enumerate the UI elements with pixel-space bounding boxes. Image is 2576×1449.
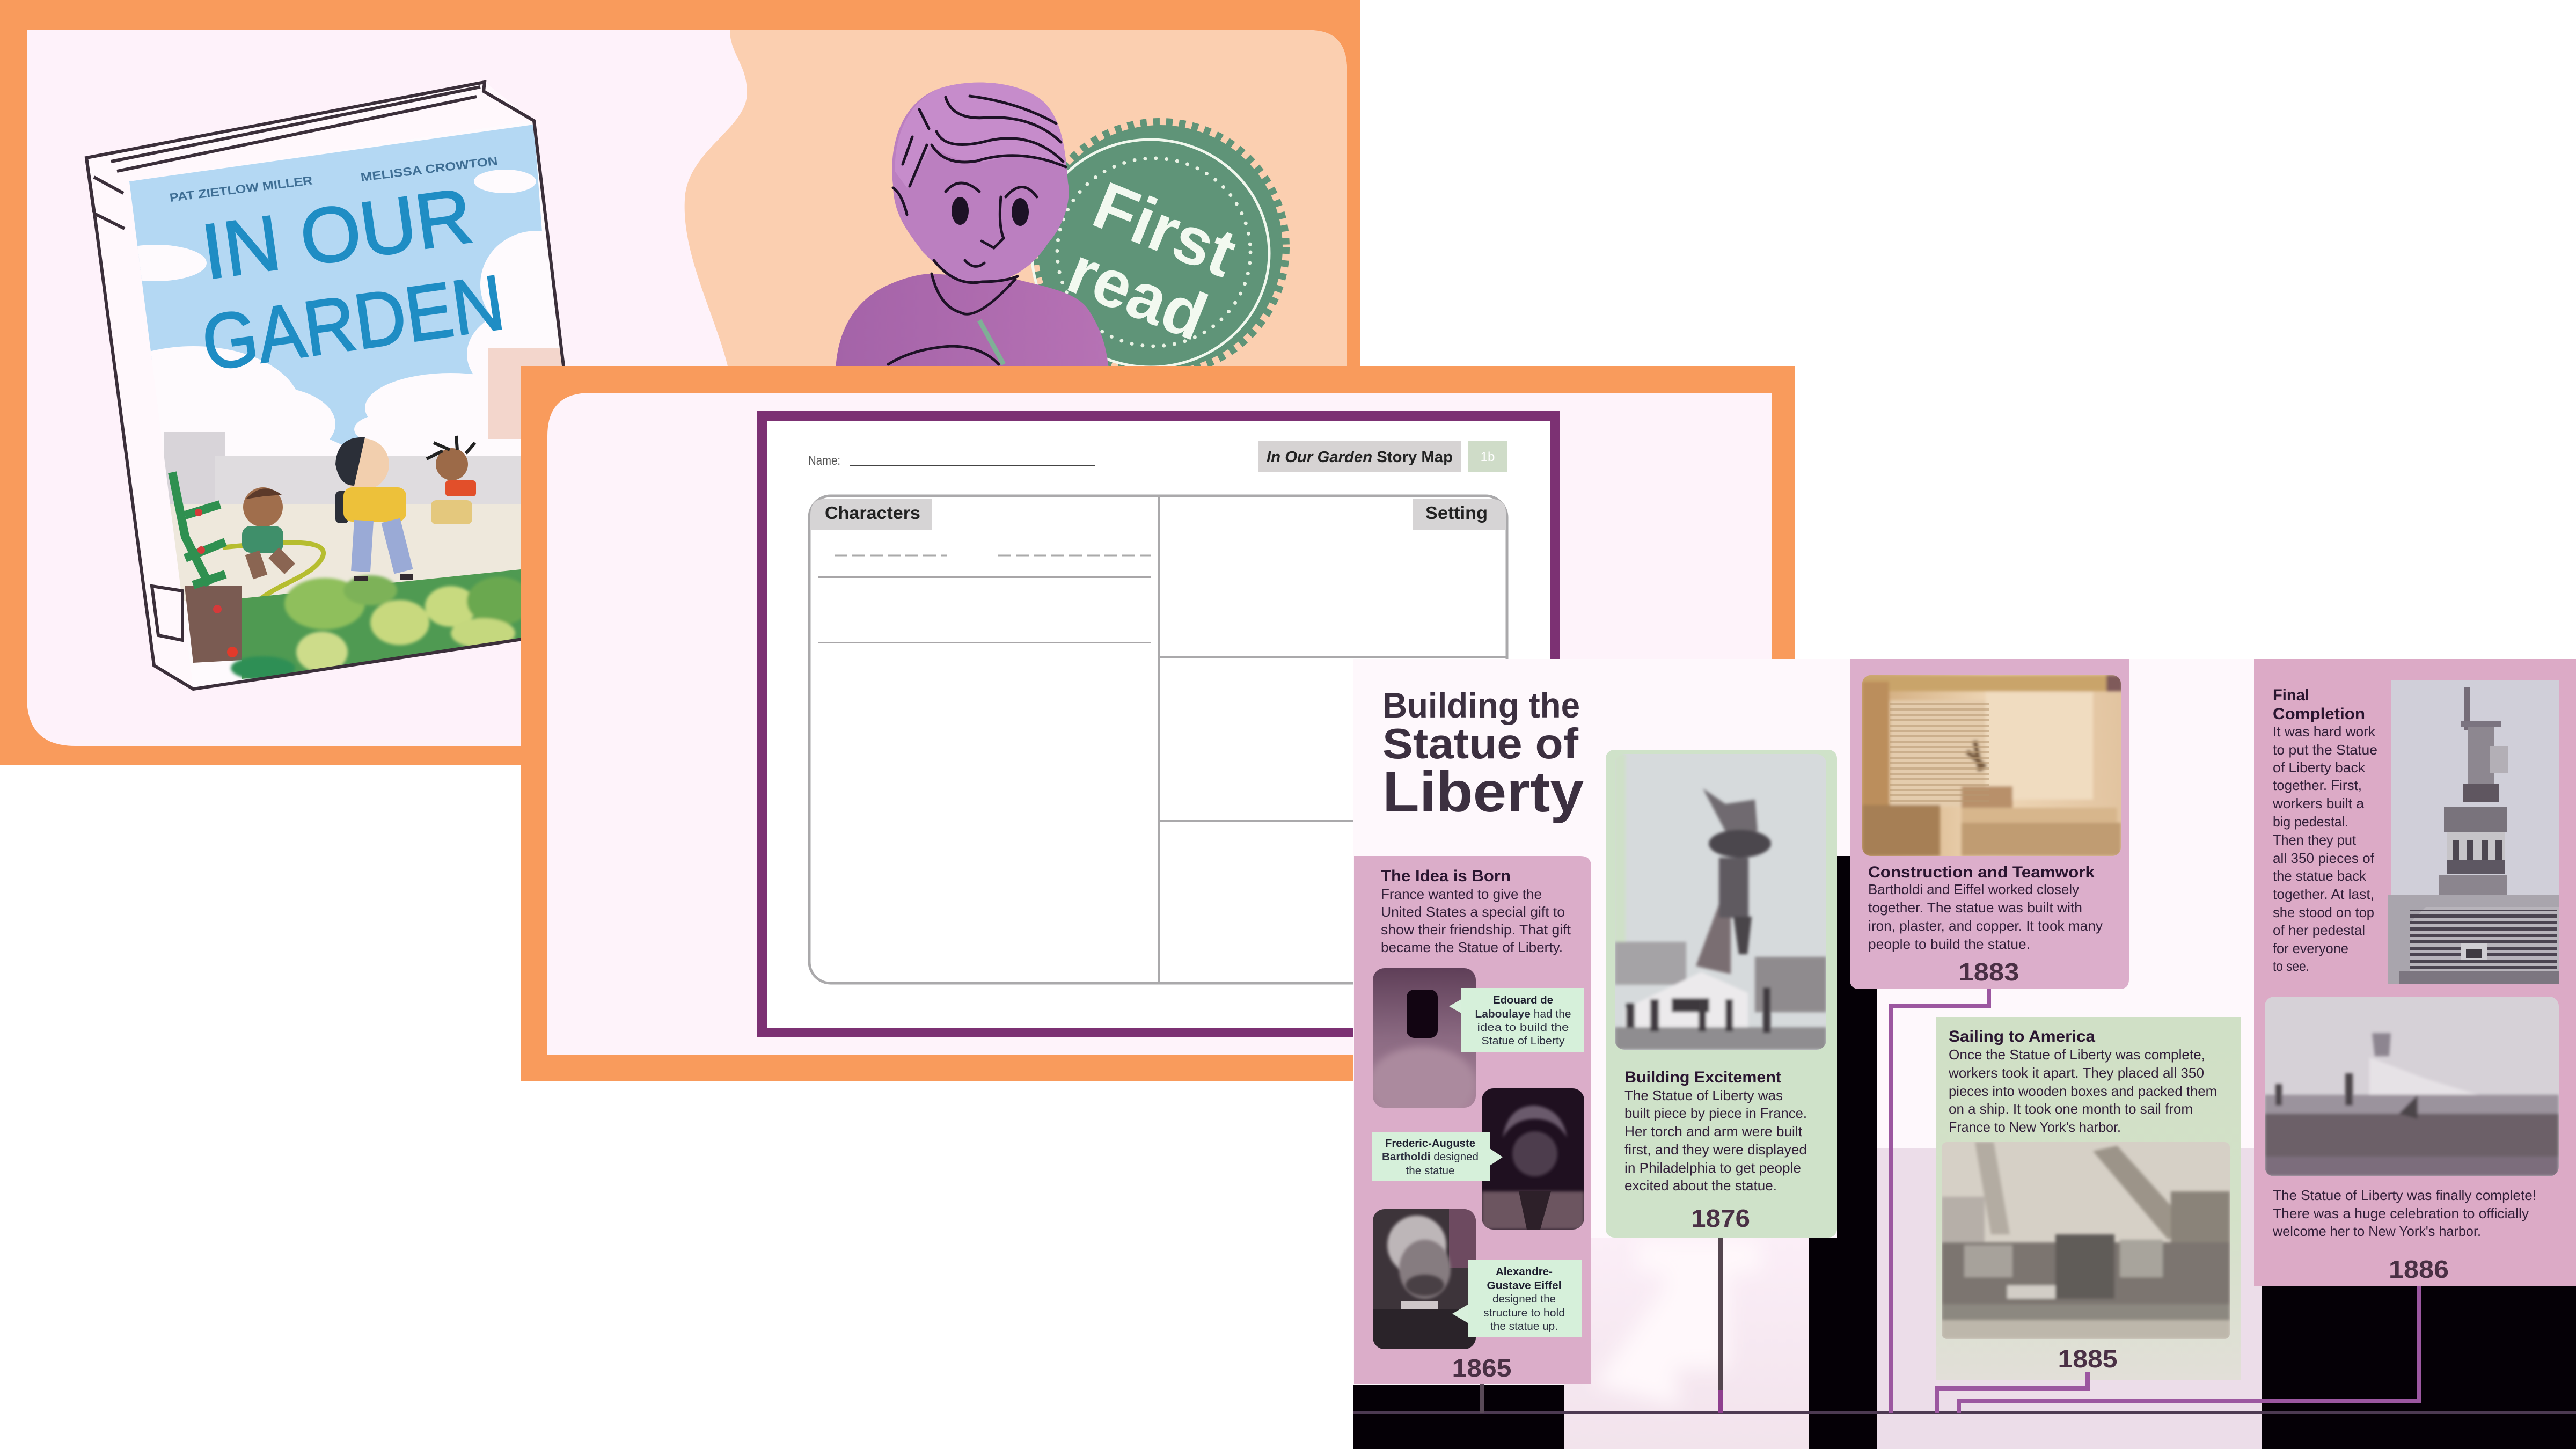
card: 1876 building excitement bbox=[1606, 750, 1837, 1238]
card: 1886 final completion bbox=[2254, 659, 2576, 1286]
photo: harbor celebration bbox=[2265, 997, 2559, 1176]
card text: The Statue of Liberty was bbox=[1624, 1087, 1783, 1103]
title: Liberty bbox=[1382, 760, 1584, 824]
badge text: read bbox=[1058, 232, 1217, 355]
card text: Building Excitement bbox=[1624, 1069, 1781, 1086]
celebration text: The Statue of Liberty was finally complete! bbox=[2273, 1187, 2536, 1203]
card text: of her pedestal bbox=[2273, 922, 2365, 938]
setting tab: Setting bbox=[1425, 503, 1488, 523]
callout: Eiffel: structure to hold bbox=[1483, 1307, 1565, 1319]
card background bbox=[1606, 750, 1837, 1238]
card text: Once the Statue of Liberty was complete, bbox=[1949, 1046, 2205, 1063]
year: 1885: 1885 bbox=[2058, 1345, 2118, 1373]
card text: iron, plaster, and copper. It took many bbox=[1868, 918, 2103, 934]
card text: show their friendship. That gift bbox=[1381, 921, 1571, 938]
celebration text: welcome her to New York's harbor. bbox=[2272, 1223, 2481, 1239]
card text: the statue back bbox=[2273, 868, 2367, 884]
card text: excited about the statue. bbox=[1624, 1177, 1777, 1194]
name line: Name: bbox=[808, 453, 840, 468]
card text: on a ship. It took one month to sail from bbox=[1949, 1101, 2193, 1117]
book illustration bbox=[85, 80, 565, 691]
callout: Eiffel bbox=[1452, 1260, 1582, 1337]
title: Building the bbox=[1382, 685, 1580, 725]
card background bbox=[1936, 1017, 2241, 1380]
callout: Laboulaye: Edouard de bbox=[1493, 994, 1553, 1006]
card text: pieces into wooden boxes and packed them bbox=[1949, 1083, 2217, 1099]
title bbox=[1382, 685, 1584, 824]
card: 1865 the idea is born bbox=[1354, 856, 1591, 1384]
panel: first read slide bbox=[0, 0, 1360, 765]
card text bbox=[1381, 867, 1571, 955]
pale inner panel bbox=[547, 393, 1772, 1055]
card background bbox=[1354, 856, 1591, 1384]
faded background lavender bbox=[1877, 1148, 2262, 1449]
cover title bbox=[197, 172, 509, 387]
hair bbox=[895, 83, 1066, 188]
card text: together. First, bbox=[2273, 777, 2362, 793]
worksheet title chip: In Our Garden Story Map bbox=[1267, 449, 1453, 466]
card text: France wanted to give the bbox=[1381, 886, 1542, 902]
head bbox=[892, 83, 1069, 283]
peach blob bbox=[685, 30, 1347, 376]
characters tab: Characters bbox=[825, 503, 920, 523]
celebration text: There was a huge celebration to officially bbox=[2273, 1205, 2529, 1221]
worksheet title chip bbox=[1258, 441, 1461, 472]
page tab bbox=[1468, 441, 1507, 472]
card text: workers built a bbox=[2272, 795, 2365, 811]
cover title: GARDEN bbox=[197, 259, 509, 387]
title: Statue of bbox=[1382, 720, 1578, 767]
card text: for everyone bbox=[2273, 940, 2348, 956]
story map grid bbox=[809, 496, 1507, 983]
card text: The Idea is Born bbox=[1381, 867, 1511, 885]
card text: in Philadelphia to get people bbox=[1624, 1160, 1801, 1176]
transparent black areas bbox=[1353, 856, 2576, 1449]
card text: Completion bbox=[2273, 705, 2365, 723]
callout: Eiffel: the statue up. bbox=[1490, 1321, 1558, 1333]
page tab: 1b bbox=[1481, 450, 1495, 464]
card text: people to build the statue. bbox=[1868, 936, 2030, 952]
photo: workshop bbox=[1862, 675, 2123, 856]
year: 1876: 1876 bbox=[1691, 1204, 1750, 1232]
orange frame bbox=[0, 0, 1360, 765]
timeline axis bbox=[1353, 1411, 2576, 1414]
card text: to put the Statue bbox=[2273, 742, 2377, 758]
callout: Eiffel: Alexandre- bbox=[1496, 1266, 1553, 1278]
setting tab bbox=[1413, 499, 1506, 530]
name line bbox=[808, 453, 1095, 468]
card: 1885 sailing to america bbox=[1936, 1017, 2241, 1380]
card text: of Liberty back bbox=[2273, 759, 2366, 775]
children on the cover bbox=[242, 436, 476, 579]
cover author names bbox=[169, 154, 499, 204]
photo: statue on pedestal bbox=[2388, 680, 2560, 984]
callout: Bartholdi: the statue bbox=[1406, 1165, 1454, 1177]
book cover art bbox=[129, 125, 562, 680]
callout: Bartholdi: Frederic-Auguste bbox=[1385, 1138, 1475, 1150]
card text bbox=[1624, 1069, 1807, 1194]
book pages and outline bbox=[86, 82, 597, 689]
card text: to see. bbox=[2273, 958, 2309, 974]
cover author names: PAT ZIETLOW MILLER bbox=[169, 173, 313, 204]
worksheet frame bbox=[762, 416, 1555, 1033]
card text bbox=[1868, 863, 2103, 952]
photo: torch and arm bbox=[1615, 754, 1826, 1050]
card text bbox=[1948, 1028, 2217, 1135]
card text: Sailing to America bbox=[1949, 1028, 2095, 1045]
card text: all 350 pieces of bbox=[2273, 850, 2375, 866]
card background bbox=[2254, 659, 2576, 1286]
card: 1883 construction and teamwork bbox=[1850, 659, 2129, 989]
card text: she stood on top bbox=[2273, 904, 2374, 920]
timeline connectors bbox=[1482, 989, 2419, 1413]
callout: Laboulaye: Laboulaye had the bbox=[1475, 1008, 1571, 1020]
card text: became the Statue of Liberty. bbox=[1381, 939, 1563, 955]
card text bbox=[2272, 686, 2377, 974]
card text: together. The statue was built with bbox=[1868, 899, 2082, 916]
writing lines bbox=[818, 555, 1151, 643]
photo: ship bbox=[1942, 1142, 2230, 1339]
celebration text bbox=[2272, 1187, 2536, 1239]
card text: It was hard work bbox=[2273, 723, 2376, 740]
panel: statue of liberty timeline bbox=[1353, 659, 2576, 1449]
card text: together. At last, bbox=[2273, 886, 2374, 902]
card text: first, and they were displayed bbox=[1624, 1141, 1807, 1158]
photo: Bartholdi bbox=[1482, 1088, 1584, 1230]
card text: France to New York's harbor. bbox=[1949, 1119, 2121, 1135]
callout: Laboulaye: Statue of Liberty bbox=[1481, 1035, 1565, 1047]
card text: Then they put bbox=[2273, 832, 2357, 848]
pale inner panel bbox=[27, 30, 1347, 746]
callout: Laboulaye bbox=[1449, 988, 1584, 1052]
cover author names: MELISSA CROWTON bbox=[360, 154, 499, 184]
body bbox=[836, 274, 1109, 370]
callout: Eiffel: designed the bbox=[1492, 1293, 1556, 1305]
callout: Laboulaye: idea to build the bbox=[1477, 1022, 1569, 1034]
year: 1865: 1865 bbox=[1452, 1354, 1511, 1382]
icon: reading child character bbox=[836, 83, 1109, 370]
badge rings bbox=[1032, 140, 1269, 367]
badge: first read bbox=[1032, 123, 1285, 372]
year: 1886: 1886 bbox=[2389, 1255, 2449, 1283]
faded statue background bbox=[1564, 1238, 1809, 1449]
badge text bbox=[1058, 168, 1246, 355]
card text: big pedestal. bbox=[2273, 814, 2348, 830]
card text: built piece by piece in France. bbox=[1624, 1105, 1807, 1121]
characters tab bbox=[810, 499, 932, 530]
card text: Bartholdi and Eiffel worked closely bbox=[1868, 881, 2079, 897]
panel background bbox=[1353, 659, 2576, 1449]
photo: Laboulaye bbox=[1373, 968, 1476, 1108]
card text: workers took it apart. They placed all 350 bbox=[1948, 1065, 2204, 1081]
face lines and hair lines bbox=[888, 96, 1066, 364]
card background bbox=[1850, 659, 2129, 989]
card text: Construction and Teamwork bbox=[1868, 863, 2095, 881]
callout: Bartholdi bbox=[1372, 1132, 1503, 1181]
callout: Bartholdi: Bartholdi designed bbox=[1382, 1151, 1479, 1163]
badge text: First bbox=[1084, 168, 1246, 291]
card text: Her torch and arm were built bbox=[1624, 1123, 1803, 1139]
year: 1883: 1883 bbox=[1959, 958, 2019, 986]
orange frame bbox=[521, 366, 1795, 1081]
worksheet bbox=[762, 416, 1555, 1033]
callout: Eiffel: Gustave Eiffel bbox=[1487, 1280, 1562, 1292]
eyes bbox=[952, 197, 1029, 226]
card text: United States a special gift to bbox=[1381, 904, 1565, 920]
strap bbox=[979, 320, 1004, 364]
book outline lines bbox=[86, 82, 597, 689]
cover title: IN OUR bbox=[197, 172, 477, 296]
photo: Eiffel bbox=[1373, 1209, 1476, 1349]
card text: Final bbox=[2273, 686, 2309, 704]
badge scalloped edge bbox=[1036, 123, 1285, 372]
panel: story map slide bbox=[521, 366, 1795, 1081]
